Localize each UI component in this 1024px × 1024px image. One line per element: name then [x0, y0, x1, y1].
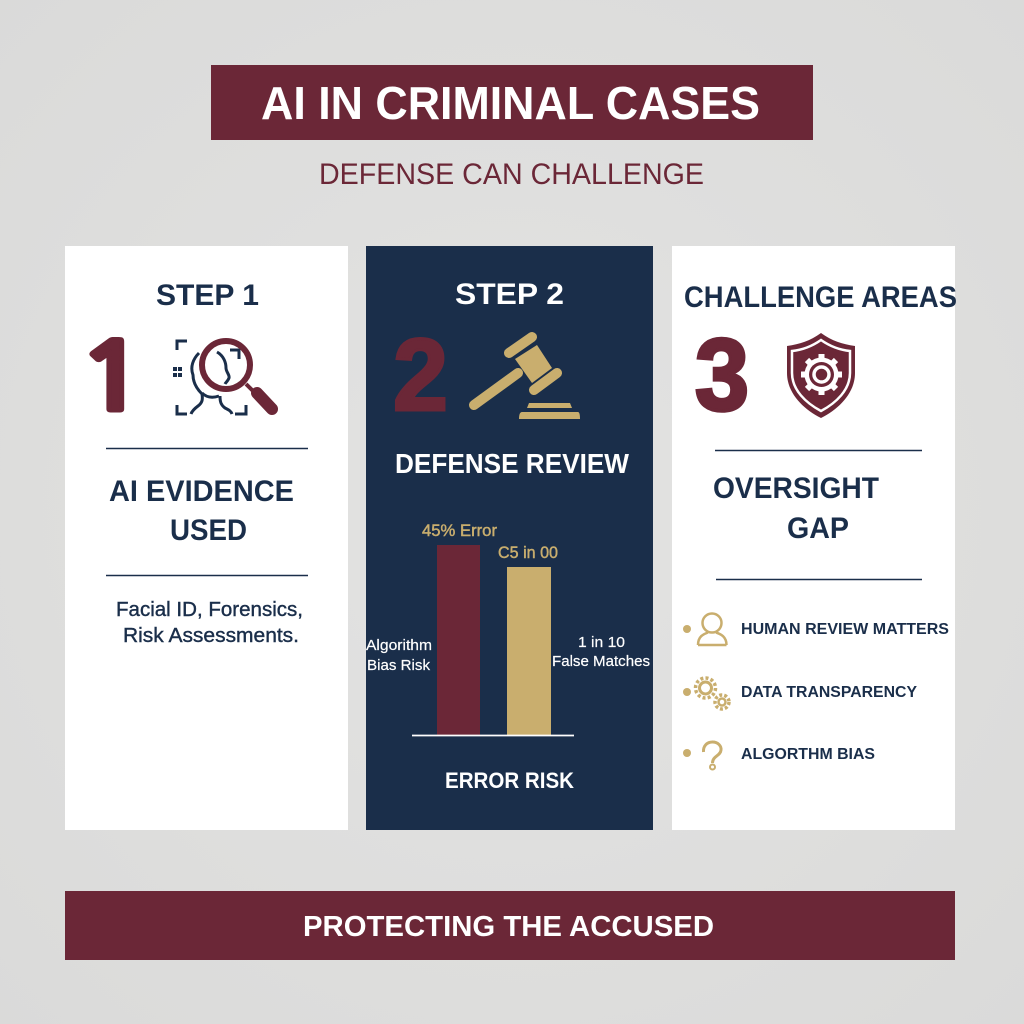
- chart caption: ERROR RISK: [445, 768, 574, 793]
- heading: AI evidence used: [109, 475, 294, 547]
- footer banner: [65, 891, 955, 960]
- numeral 1: 1: [77, 332, 149, 425]
- heading: oversight gap: [713, 472, 879, 545]
- step 2 heading: STEP 2: [455, 278, 564, 311]
- bar chart: 1 in 10: [578, 634, 625, 651]
- heading: AI evidence used: USED: [170, 514, 247, 547]
- subtitle: DEFENSE CAN CHALLENGE: [319, 158, 704, 191]
- list item: human review: [683, 614, 949, 645]
- heading: oversight gap: GAP: [787, 512, 849, 545]
- description: [116, 599, 303, 647]
- title banner: [211, 65, 813, 140]
- bar chart: 45% Error: [422, 522, 498, 540]
- heading: defense review: DEFENSE REVIEW: [395, 448, 630, 479]
- bar chart: [366, 522, 650, 736]
- numeral 3: 3: [695, 318, 749, 432]
- panel: step 1: [65, 246, 348, 830]
- list item: human review: HUMAN REVIEW MATTERS: [741, 621, 949, 638]
- icon: face scan with magnifier: [173, 341, 272, 414]
- panel: challenge areas: [672, 246, 957, 830]
- list item: data transparency: [683, 678, 918, 709]
- heading: AI evidence used: AI EVIDENCE: [109, 475, 294, 508]
- bar chart: C5 in 00: [498, 544, 558, 562]
- icon: shield with gear: [787, 333, 855, 418]
- list item: algorithm bias: [683, 742, 875, 770]
- footer banner: PROTECTING THE ACCUSED: [303, 911, 714, 943]
- numeral 2: 2: [393, 318, 448, 432]
- list item: algorithm bias: ALGORTHM BIAS: [741, 746, 875, 763]
- bar chart: False Matches: [552, 653, 650, 670]
- divider: [715, 450, 922, 580]
- panel: step 2: [366, 246, 653, 830]
- heading: oversight gap: OVERSIGHT: [713, 472, 879, 505]
- title banner: AI IN CRIMINAL CASES: [261, 77, 760, 129]
- bar chart: Bias Risk: [367, 657, 431, 674]
- challenge areas heading: CHALLENGE AREAS: [684, 281, 957, 314]
- step 1 heading: STEP 1: [156, 279, 259, 312]
- bar chart: Algorithm: [366, 637, 432, 654]
- description: Facial ID, Forensics,: [116, 599, 303, 621]
- list item: data transparency: DATA TRANSPARENCY: [741, 684, 918, 701]
- icon: gavel: [474, 337, 580, 419]
- description: Risk Assessments.: [123, 625, 299, 647]
- divider: [106, 448, 308, 576]
